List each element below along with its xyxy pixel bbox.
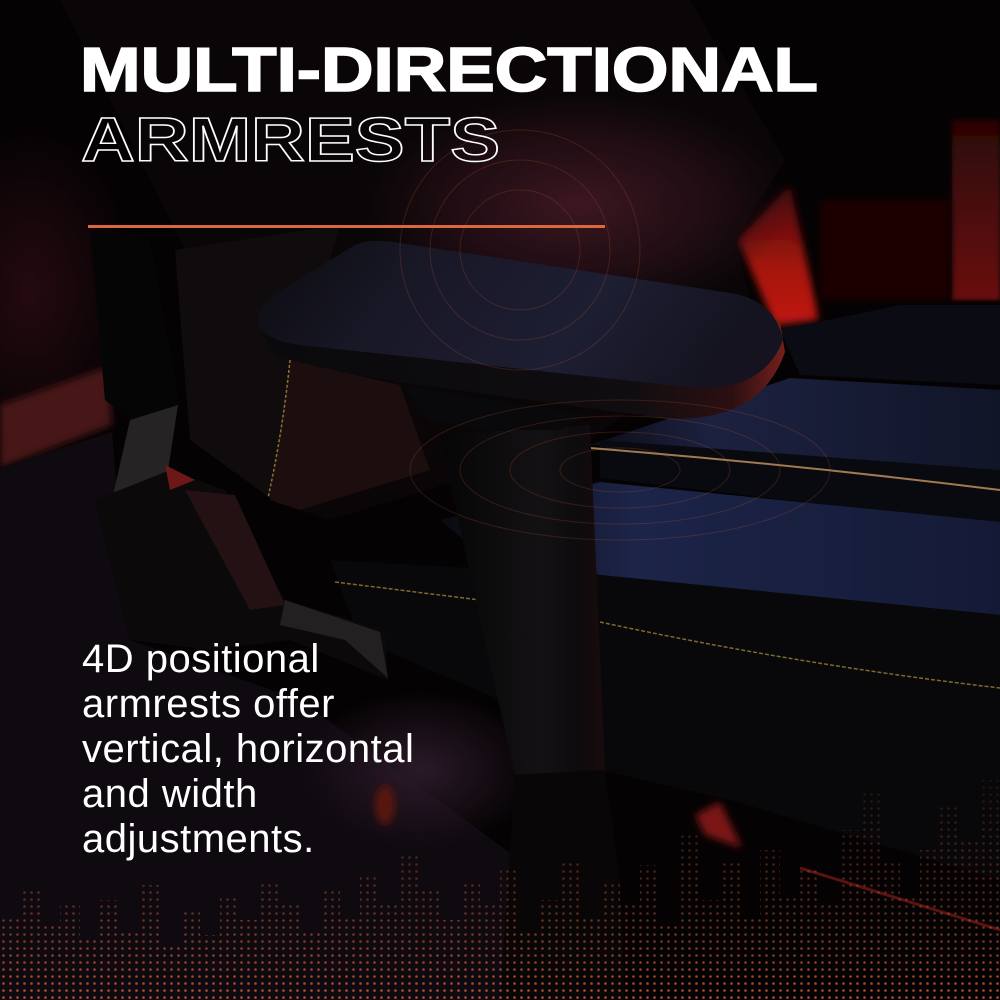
armrest pad side	[258, 322, 785, 419]
body text	[82, 637, 414, 861]
lever red accent	[165, 465, 195, 490]
red wall upper right	[952, 120, 1000, 300]
title line 2 outlined: ARMRESTS	[81, 106, 500, 175]
seat front stitch	[335, 582, 1000, 688]
seat front	[330, 560, 1000, 880]
seat lower blue	[440, 482, 1000, 615]
side bolster	[175, 225, 340, 505]
seat band dark	[600, 440, 1000, 525]
body text: vertical, horizontal	[82, 727, 414, 771]
base red glow	[695, 802, 742, 848]
concentric rings	[400, 130, 830, 540]
seat back dark	[780, 305, 1000, 385]
dim wall right	[820, 200, 950, 300]
backrest glow	[370, 95, 790, 315]
post base	[500, 770, 625, 1000]
armrest post	[440, 425, 605, 775]
armrest pad top	[258, 241, 783, 388]
yellow stitching	[268, 360, 290, 498]
lever plate	[185, 490, 285, 610]
body text: 4D positional	[82, 637, 320, 681]
body text: adjustments.	[82, 817, 315, 861]
lower backrest panel	[270, 360, 430, 510]
title line 1: MULTI-DIRECTIONAL	[80, 36, 818, 105]
frame pillar highlight	[112, 405, 178, 500]
body text: armrests offer	[82, 682, 335, 726]
title	[80, 36, 818, 228]
seat stitch line	[590, 448, 1000, 490]
lever paddle	[280, 600, 388, 678]
base red line	[800, 868, 1000, 930]
dotted equalizer at bottom	[0, 780, 1000, 1000]
background glow: floor stripe	[0, 367, 112, 468]
seat upper blue	[590, 378, 1000, 470]
caster red	[375, 785, 395, 825]
chair backrest	[60, 0, 785, 520]
lever mechanism	[95, 470, 388, 680]
background glow: left wall	[0, 120, 140, 460]
red glow behind chair	[738, 185, 818, 325]
floor	[0, 432, 520, 1000]
orange divider rule	[88, 225, 605, 228]
armrest mount	[400, 385, 590, 430]
body text: and width	[82, 772, 258, 816]
frame pillar	[90, 230, 180, 420]
floor highlight	[300, 690, 540, 850]
